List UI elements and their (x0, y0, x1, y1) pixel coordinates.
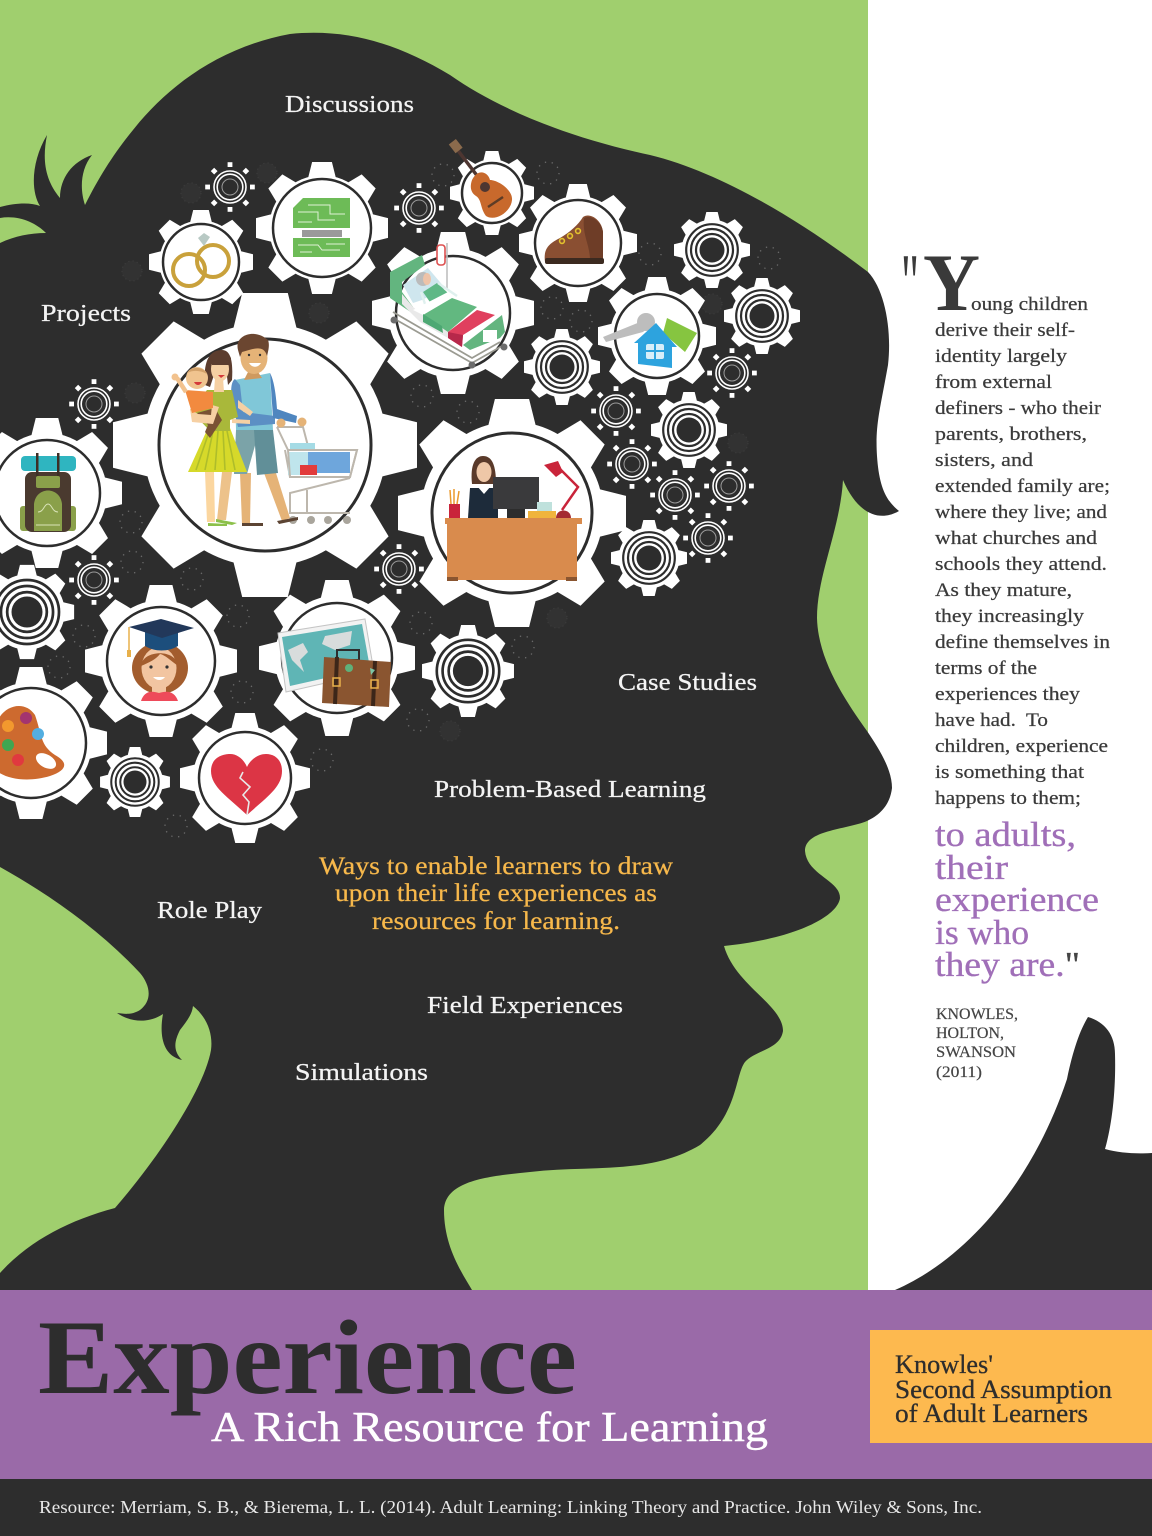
title band (0, 1290, 1152, 1479)
callout box: Knowles' second assumption: of Adult Learners (895, 1399, 1088, 1428)
label: Field Experiences: Field Experiences (427, 993, 623, 1019)
callout: ways to enable learners (319, 853, 673, 935)
label: Discussions: Discussions (285, 92, 414, 118)
green gap above hair (0, 217, 46, 243)
quote: opening text (901, 237, 1111, 809)
footer: resource citation: Resource: Merriam, S. B., & Bierema, L. L. (2014). Adult Learning: Linking Theory and Practice. John Wiley & Sons, Inc. (39, 1497, 982, 1518)
faint dotted gears (48, 162, 780, 837)
quote: opening text: sisters, and (935, 450, 1034, 471)
quote: opening text: children, experience (935, 736, 1108, 757)
gear: wedding rings (149, 210, 253, 314)
quote: opening text: schools they attend. (935, 554, 1107, 575)
quote: opening text: derive their self- (935, 320, 1075, 341)
quote: opening text: where they live; and (935, 502, 1108, 523)
gear: circuit boards (256, 162, 388, 294)
gear: guitar (449, 139, 534, 235)
quote: opening text: oung children (971, 294, 1089, 315)
citation: KNOWLES, (936, 1006, 1018, 1023)
quote: opening text: from external (935, 372, 1052, 393)
quote: opening text: happens to them; (935, 788, 1081, 809)
green area behind neck with hair wisp (0, 867, 211, 1273)
concentric ring gears (0, 212, 800, 817)
label: Problem-Based Learning: Problem-Based Learning (434, 777, 706, 803)
gear: graduate (85, 585, 237, 737)
gear: backpack (0, 418, 122, 568)
quote: highlighted conclusion: their (935, 848, 1008, 887)
icon: shopping cart (277, 427, 357, 513)
quote: opening text: define themselves in (935, 632, 1111, 653)
citation: HOLTON, (936, 1025, 1004, 1042)
label: Simulations: Simulations (295, 1060, 428, 1086)
subtitle: A Rich Resource for Learning (211, 1405, 768, 1451)
callout box: Knowles' second assumption (870, 1330, 1152, 1443)
citation (936, 1006, 1018, 1081)
quote: opening text: terms of the (935, 658, 1037, 679)
label: Case Studies: Case Studies (618, 670, 757, 696)
background: white panel (868, 0, 1152, 1290)
quote: opening text: they increasingly (935, 606, 1085, 627)
callout: ways to enable learners: resources for learning. (372, 908, 620, 935)
gear: broken heart (180, 713, 310, 843)
title: Experience: Experience (38, 1299, 577, 1416)
quote: highlighted conclusion: they are. " (935, 945, 1080, 984)
label: Role Play: Role Play (157, 898, 262, 924)
icon: father (231, 334, 306, 526)
callout: ways to enable learners: Ways to enable learners to draw (319, 853, 673, 880)
gear: hospital bed (372, 232, 534, 394)
quote: highlighted conclusion (935, 815, 1099, 984)
quote: opening text: have had. To (935, 710, 1048, 731)
quote: opening text: Y (923, 237, 980, 328)
quote: opening text: experiences they (935, 684, 1081, 705)
gear: office desk (398, 399, 626, 627)
citation: SWANSON (936, 1044, 1016, 1061)
icon: baby (197, 408, 222, 438)
quote: highlighted conclusion: experience (935, 880, 1099, 919)
quote: opening text: parents, brothers, (935, 424, 1087, 445)
silhouette: second figure shoulder (895, 1017, 1152, 1290)
small ring gears (69, 162, 757, 605)
gear: keys and house (598, 277, 716, 395)
quote: highlighted conclusion: to adults, (935, 815, 1076, 854)
quote: opening text: identity largely (935, 346, 1068, 367)
background: green panel (0, 0, 868, 1290)
quote: opening text: As they mature, (935, 580, 1072, 601)
callout box: Knowles' second assumption: Second Assumption (895, 1375, 1112, 1404)
quote: opening text: what churches and (935, 528, 1098, 549)
gear: painter's palette (0, 667, 107, 819)
gear: map and suitcase (259, 580, 415, 736)
quote: highlighted conclusion: is who (935, 913, 1029, 952)
icon: mother (172, 350, 253, 526)
quote: opening text: definers - who their (935, 398, 1102, 419)
quote: opening text: extended family are; (935, 476, 1110, 497)
citation: (2011) (936, 1064, 982, 1081)
quote: opening text: " (901, 237, 919, 328)
footer bar (0, 1479, 1152, 1536)
label: Projects: Projects (41, 301, 131, 327)
gear: family (113, 293, 417, 597)
callout: ways to enable learners: upon their life experiences as (335, 880, 657, 907)
callout box: Knowles' second assumption: Knowles' (895, 1350, 993, 1379)
quote: opening text: is something that (935, 762, 1085, 783)
gear: boot (519, 184, 637, 302)
silhouette: child head (0, 33, 899, 1290)
